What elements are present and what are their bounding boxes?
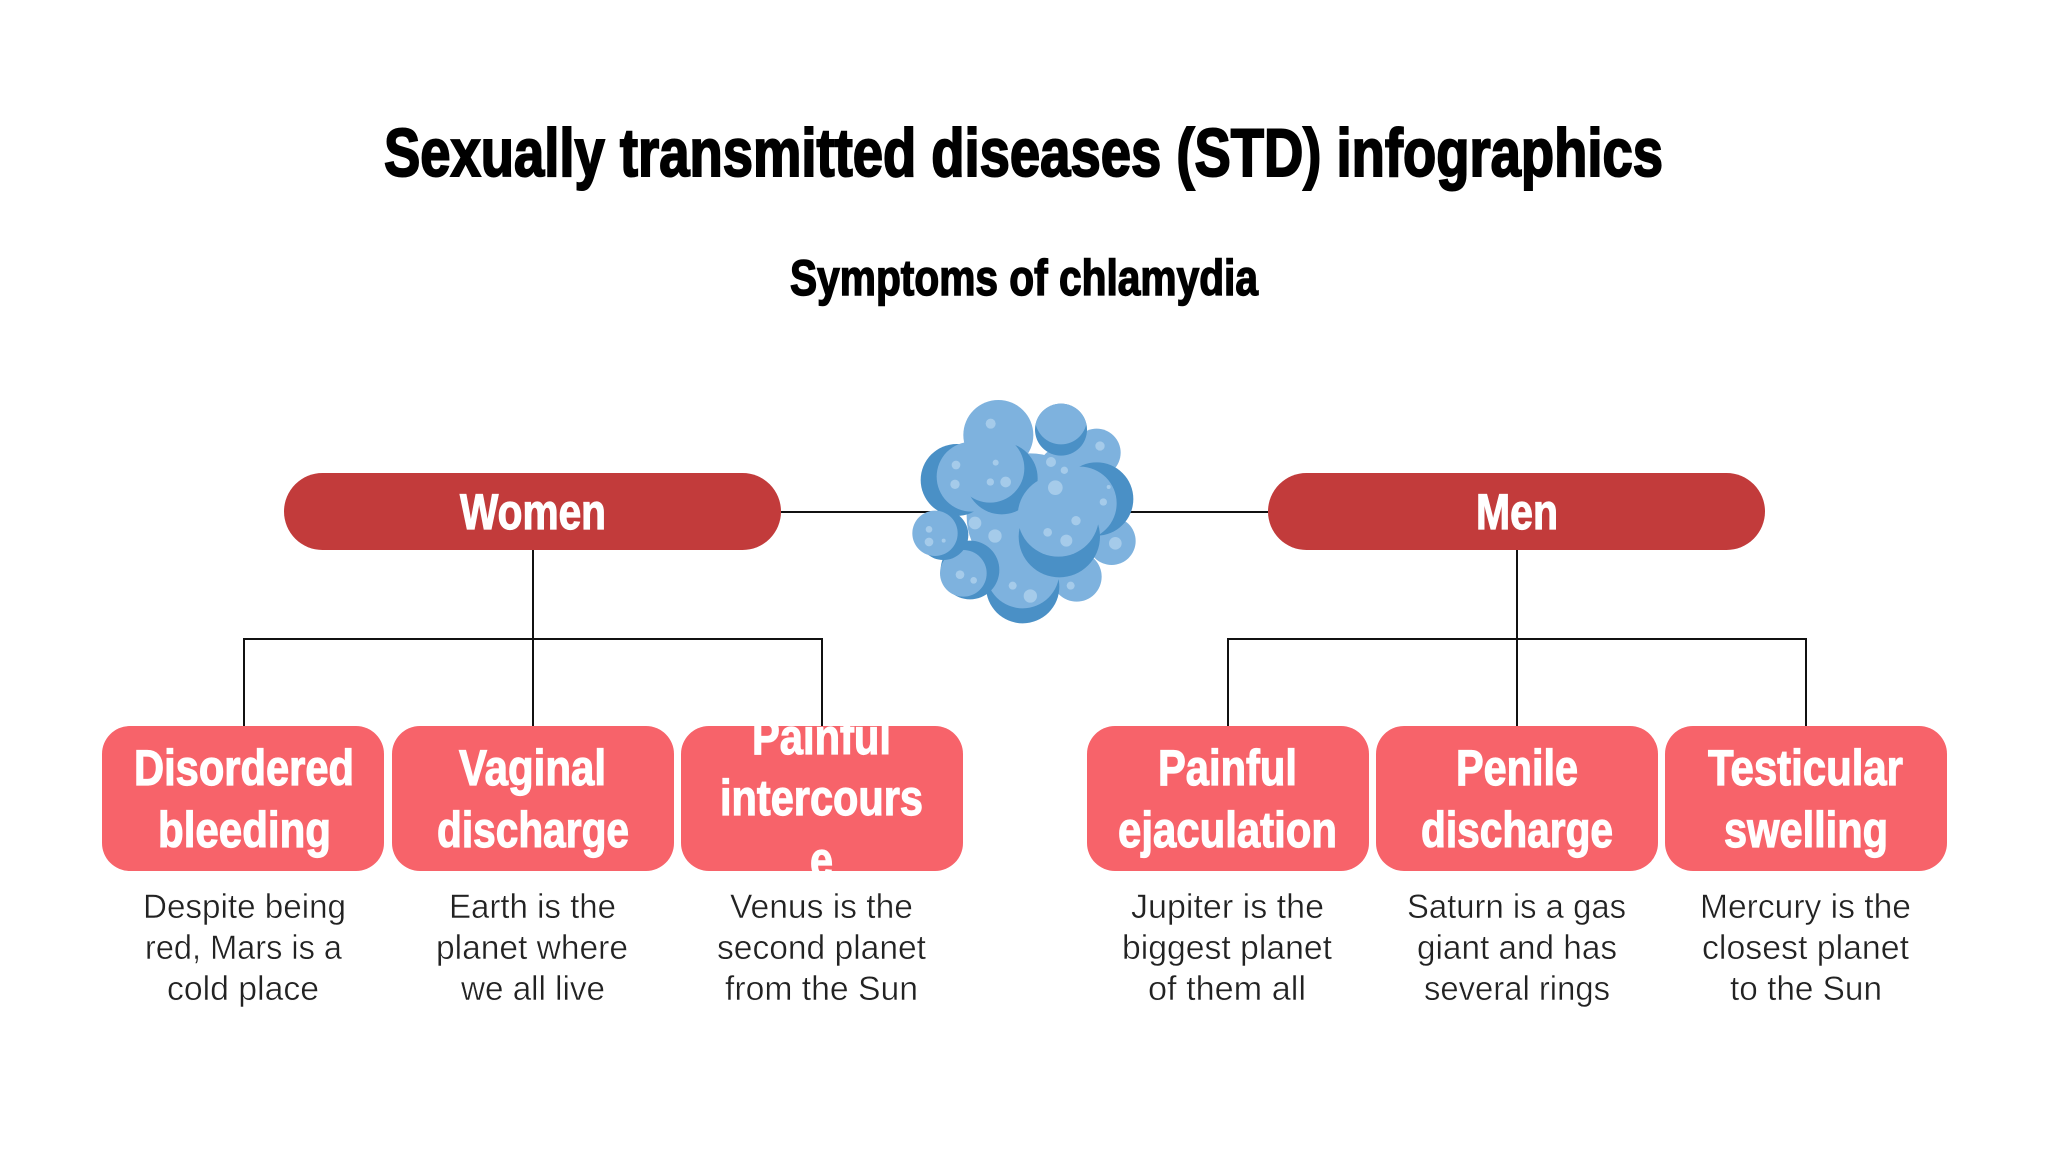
pill: women <box>284 473 781 550</box>
title: Sexually transmitted diseases (STD) infographics <box>384 115 1663 191</box>
text block: Jupiter: of them all <box>1148 970 1306 1008</box>
text block: Jupiter: Jupiter is the <box>1131 888 1324 926</box>
panel: painful intercourse: e <box>810 832 833 888</box>
panel: penile discharge: discharge <box>1421 802 1613 858</box>
panel: testicular swelling: swelling <box>1724 802 1888 858</box>
text block: Earth: we all live <box>460 970 605 1008</box>
panel: disordered bleeding <box>102 726 384 871</box>
text block: Venus: from the Sun <box>725 970 918 1008</box>
text block: Mercury <box>1700 888 1911 1008</box>
text block: Venus: Venus is the <box>730 888 913 926</box>
text block: Venus <box>717 888 927 1008</box>
panel: testicular swelling <box>1665 726 1947 871</box>
text block: Jupiter <box>1122 888 1333 1008</box>
icon: chlamydia bacteria cluster <box>912 392 1136 623</box>
text block: Mercury: to the Sun <box>1730 970 1882 1008</box>
connectors: men tree <box>1130 512 1806 726</box>
text block: Earth: planet where <box>436 929 628 967</box>
text block: Venus: second planet <box>717 929 927 967</box>
text block: Saturn <box>1407 888 1626 1008</box>
panel: vaginal discharge: discharge <box>437 802 629 858</box>
panel: painful ejaculation: Painful <box>1158 740 1297 796</box>
panel: disordered bleeding: bleeding <box>158 802 331 858</box>
panel: testicular swelling: Testicular <box>1708 740 1903 796</box>
panel: painful intercourse <box>681 726 963 871</box>
text block: Earth: Earth is the <box>449 888 616 926</box>
text block: Mars <box>143 888 346 1008</box>
text block: Mercury: Mercury is the <box>1700 888 1911 926</box>
connectors: women tree <box>244 512 940 726</box>
text block: Saturn: Saturn is a gas <box>1407 888 1626 926</box>
panel: penile discharge: Penile <box>1456 740 1578 796</box>
panel: painful ejaculation: ejaculation <box>1118 802 1337 858</box>
text block: Mercury: closest planet <box>1702 929 1910 967</box>
panel: disordered bleeding: Disordered <box>134 740 354 796</box>
text block: Saturn: giant and has <box>1417 929 1617 967</box>
panel: penile discharge <box>1376 726 1658 871</box>
pill: women: Women <box>460 484 606 540</box>
text block: Jupiter: biggest planet <box>1122 929 1333 967</box>
panel: vaginal discharge: Vaginal <box>459 740 606 796</box>
panel: painful intercourse: intercours <box>720 770 923 826</box>
panel: vaginal discharge <box>392 726 674 871</box>
panel: painful ejaculation <box>1087 726 1369 871</box>
panel: painful intercourse: Painful <box>752 709 891 765</box>
text block: Earth <box>436 888 628 1008</box>
subtitle: Symptoms of chlamydia <box>790 250 1259 306</box>
pill: men <box>1268 473 1765 550</box>
text block: Mars: cold place <box>167 970 319 1008</box>
text block: Mars: red, Mars is a <box>145 929 342 967</box>
text block: Saturn: several rings <box>1424 970 1610 1008</box>
text block: Mars: Despite being <box>143 888 346 926</box>
pill: men: Men <box>1476 484 1558 540</box>
